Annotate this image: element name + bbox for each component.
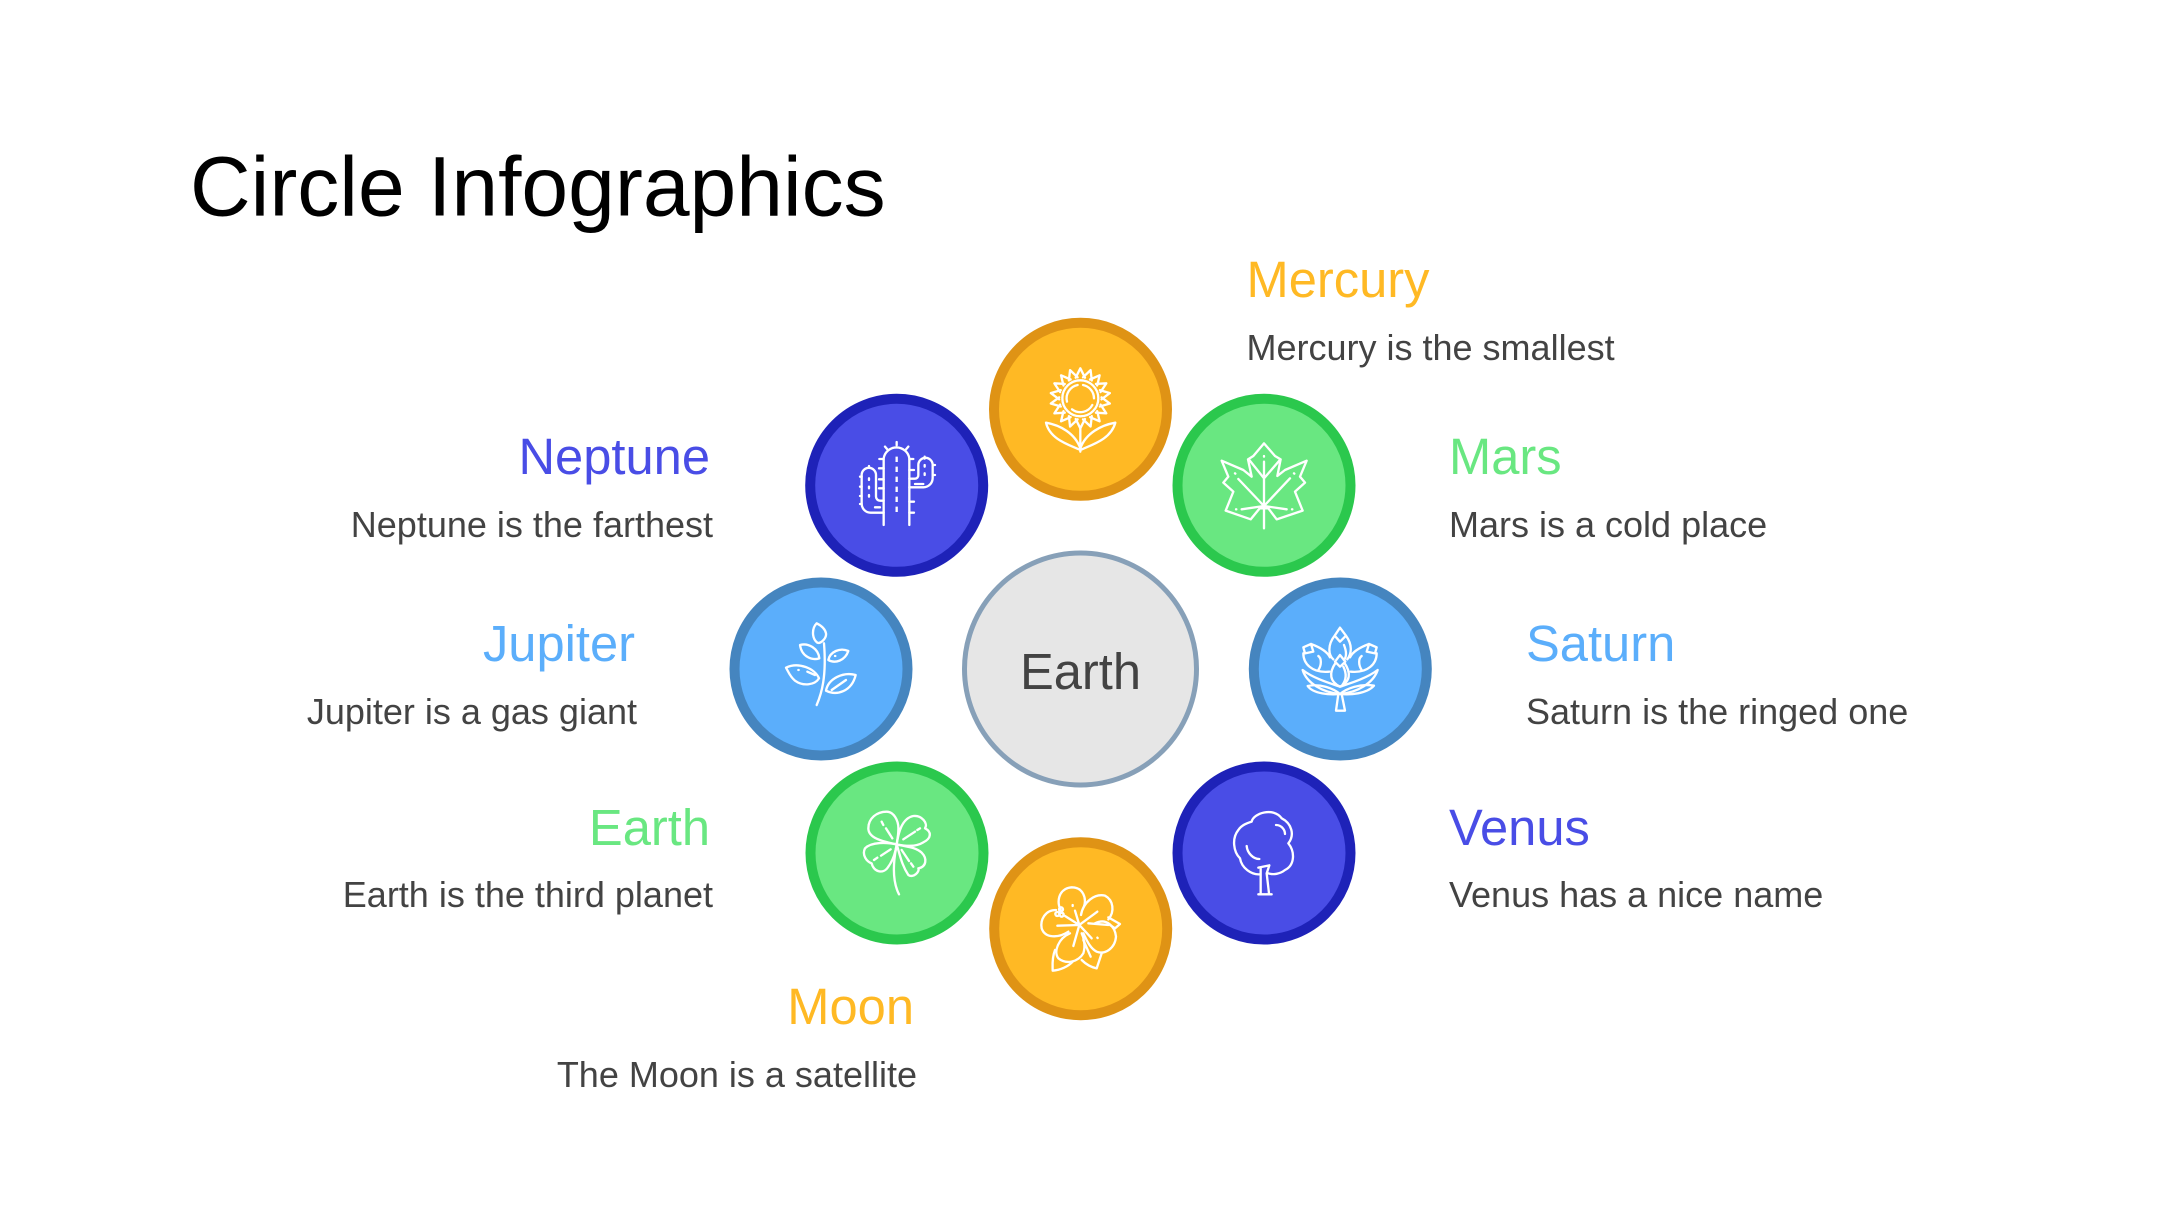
description: Jupiter: Jupiter is a gas giant xyxy=(307,691,637,732)
description: Earth: Earth is the third planet xyxy=(343,874,713,915)
label: Saturn: Saturn xyxy=(1526,615,1675,672)
label: Neptune: Neptune xyxy=(518,428,710,485)
label: Mars: Mars xyxy=(1449,428,1562,485)
node: Jupiter xyxy=(307,582,908,756)
icon: hibiscus xyxy=(1041,887,1120,971)
node: Neptune xyxy=(351,399,983,572)
icon: cactus xyxy=(860,442,935,525)
label: Mercury: Mercury xyxy=(1246,251,1430,308)
title: Circle Infographics xyxy=(190,140,886,234)
label: Jupiter: Jupiter xyxy=(483,615,635,672)
node: Earth xyxy=(343,766,984,940)
label: Venus: Venus xyxy=(1449,799,1590,856)
icon: plant sprig xyxy=(786,623,856,705)
node: Mercury xyxy=(994,251,1615,496)
description: Neptune: Neptune is the farthest xyxy=(351,504,713,545)
label: Moon: Moon xyxy=(787,978,914,1035)
description: Mercury: Mercury is the smallest xyxy=(1246,327,1615,368)
node: Moon xyxy=(557,842,1167,1095)
icon: tree xyxy=(1234,812,1293,894)
icon: maple leaf xyxy=(1222,443,1307,528)
description: Moon: The Moon is a satellite xyxy=(557,1054,917,1095)
icon: sunflower xyxy=(1046,368,1115,452)
icon: four-leaf clover xyxy=(864,812,930,894)
description: Saturn: Saturn is the ringed one xyxy=(1526,691,1908,732)
description: Mars: Mars is a cold place xyxy=(1449,504,1767,545)
icon: lotus xyxy=(1303,628,1378,711)
center circle: Earth: Earth xyxy=(1020,643,1141,700)
node: Venus xyxy=(1178,766,1823,940)
node: Mars xyxy=(1178,399,1767,572)
center circle: Earth xyxy=(964,553,1196,785)
label: Earth: Earth xyxy=(589,799,710,856)
node: Saturn xyxy=(1254,582,1908,756)
description: Venus: Venus has a nice name xyxy=(1449,874,1823,915)
